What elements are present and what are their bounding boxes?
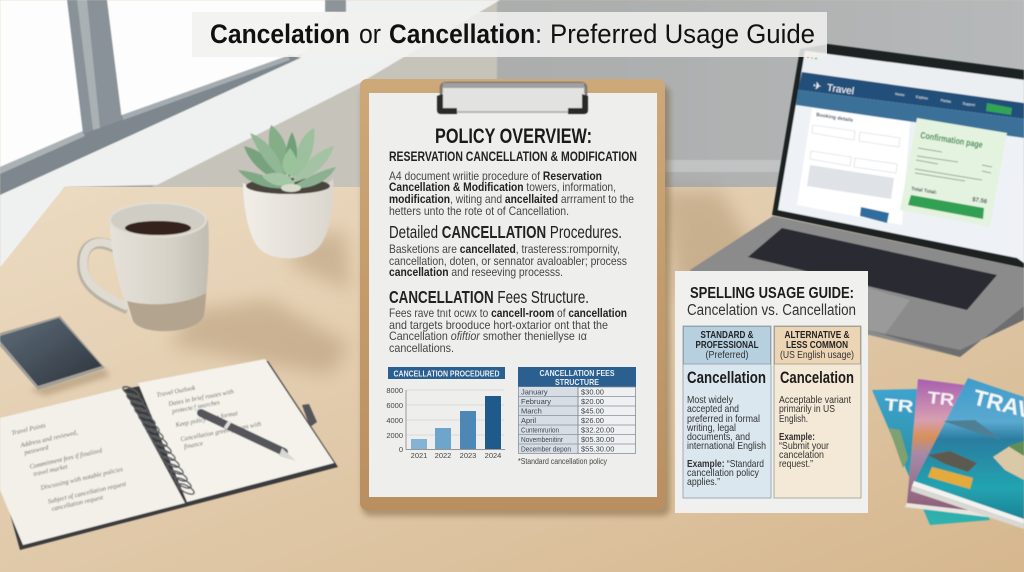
title banner: Cancellation: [389, 19, 542, 49]
column: alternative spelling: Cancelation [780, 368, 854, 387]
table body: $55.30.00 [581, 444, 614, 454]
right page handwriting: Keep policy at in format [174, 410, 239, 429]
site nav bar [796, 90, 1024, 138]
table header: STRUCTURE [555, 377, 599, 387]
intro paragraph: Cancellation & Modification towers, information, [389, 180, 616, 194]
mug rim [110, 203, 206, 237]
table body: Novembenitinr [521, 435, 563, 444]
left page [0, 388, 185, 545]
procedures paragraph: cancellation and reseeving processs. [389, 265, 563, 279]
trackpad [868, 288, 910, 334]
bars [411, 396, 501, 449]
column: standard spelling: documents, and [687, 432, 750, 443]
section heading: fees: CANCELLATION Fees Structure. [389, 287, 589, 307]
column: standard spelling: applies.” [687, 477, 720, 488]
table body: Cuntemrurion [521, 426, 559, 434]
rocky island [928, 451, 977, 472]
metal clip [437, 83, 588, 114]
table body: $32.20.00 [581, 426, 614, 434]
site header [798, 72, 1024, 119]
column: standard spelling: (Preferred) [706, 350, 748, 361]
screen [778, 51, 1024, 263]
pot [243, 178, 333, 258]
table body: $05.30.00 [581, 435, 614, 444]
document heading: POLICY OVERVIEW: [435, 125, 592, 148]
y axis labels: 8000 [386, 386, 403, 395]
magazine: middle: TR [927, 388, 955, 410]
column: standard spelling: STANDARD & [700, 330, 754, 341]
laptop [690, 44, 1024, 357]
browser chrome [802, 51, 1024, 103]
column: standard spelling: international English [687, 441, 766, 452]
pen [192, 407, 296, 461]
fees paragraph: Cancellation ofiftior smother theniellyse ıα [389, 329, 587, 343]
table body: December depon [521, 444, 571, 454]
column: standard spelling: preferred in formal [687, 414, 760, 425]
column: alternative spelling: cancelation [779, 450, 824, 461]
window sill [0, 0, 500, 268]
right page handwriting: Cancellation green groups with [180, 421, 262, 443]
smartphone [0, 316, 105, 390]
procedures paragraph: Basketions are cancellated, trasteress:rompornity, [389, 242, 620, 256]
booking panel [797, 108, 910, 225]
mug clay base [127, 293, 206, 331]
window panes [0, 0, 346, 167]
bar chart: cancellation procedured [386, 367, 505, 460]
y axis labels [386, 386, 403, 454]
title banner: Preferred Usage Guide [550, 19, 815, 49]
distant headland [943, 420, 1002, 440]
title banner: Cancelation [210, 19, 350, 49]
phone shadow [30, 368, 110, 396]
fees paragraph: Fees rave tnıt ocwx to cancell-room of cancellation [389, 306, 627, 320]
y axis labels: 2000 [386, 431, 403, 440]
magazine: back [872, 389, 990, 525]
desk shadows [170, 190, 760, 375]
form fields [812, 125, 855, 140]
column: alternative spelling: “Submit your [779, 441, 829, 452]
chart axes and gridlines [406, 390, 505, 450]
y axis labels: 0 [399, 445, 403, 454]
table body: April [521, 416, 536, 425]
right page handwriting: Travel Outlook [156, 385, 196, 399]
procedures paragraph [389, 242, 627, 279]
coffee [125, 221, 191, 235]
mug body [110, 220, 209, 331]
paper sheet [369, 93, 657, 497]
document subheading: RESERVATION CANCELLATION & MODIFICATION [389, 149, 637, 164]
nav items: Partne [940, 98, 951, 104]
nav items: Explore [916, 95, 928, 101]
left page handwriting: travel market [33, 463, 68, 478]
column: alternative spelling: (US English usage) [780, 350, 854, 361]
wooden desk [0, 187, 1024, 572]
y axis labels: 4000 [386, 416, 403, 425]
x axis labels [411, 451, 501, 460]
title banner [192, 12, 827, 57]
right page handwriting: Dates in brief routes with [167, 388, 234, 408]
background: wall and window [0, 0, 1024, 268]
window frame [0, 0, 346, 195]
left page handwriting: Subject of cancellation request [47, 481, 127, 506]
column: alternative spelling: ALTERNATIVE & [784, 330, 850, 341]
right page handwriting [156, 374, 263, 454]
confirmation button [908, 195, 984, 219]
nav items: Home [895, 92, 905, 97]
fees table [518, 367, 636, 466]
right page handwriting: protected searches [170, 399, 221, 416]
column: alternative spelling: request.” [779, 459, 813, 470]
column: alternative spelling [774, 326, 861, 498]
table body: $30.00 [581, 388, 604, 396]
left page handwriting: Travel Points [11, 422, 47, 437]
continue button [860, 207, 889, 223]
note box [807, 165, 894, 199]
clipboard [360, 79, 670, 516]
clipboard shadow [362, 86, 670, 516]
table body: $45.00 [581, 406, 604, 416]
column: alternative spelling: Acceptable variant [779, 395, 851, 406]
card background [675, 271, 868, 513]
column: alternative spelling: primarily in US [779, 404, 835, 415]
x axis labels: 2021 [411, 451, 427, 460]
column: standard spelling: cancellation policy [687, 468, 760, 479]
left page handwriting: cancellation request [51, 494, 104, 513]
chart header: CANCELLATION PROCEDURED [394, 368, 500, 378]
table body: $26.00 [581, 416, 604, 425]
left page handwriting: Address and reviewed, [19, 429, 79, 449]
nav items: Support [962, 101, 975, 107]
confirmation panel [900, 118, 1007, 227]
phone frame [0, 316, 105, 390]
spiral notebook [0, 359, 338, 550]
table body: February [521, 397, 551, 406]
detail lines [915, 148, 992, 181]
column: alternative spelling: English. [779, 414, 808, 425]
column: alternative spelling: Example: [779, 432, 815, 443]
table body: March [521, 406, 542, 416]
column: standard spelling: Most widely [687, 395, 734, 406]
phone screen [0, 318, 102, 386]
coffee mug [83, 203, 209, 331]
right page [138, 359, 334, 502]
procedures paragraph: cancellation, doten, or sennator avaloabler; process [389, 254, 627, 268]
notebook cover [0, 361, 338, 550]
table header: CANCELLATION FEES [540, 368, 615, 378]
table body [518, 387, 636, 454]
magazine: back: TR [884, 395, 914, 417]
total amount: $7.56 [972, 197, 988, 205]
nav items [895, 92, 975, 107]
confirmation heading: Confirmation page [920, 130, 983, 150]
clipboard board [360, 79, 665, 510]
fees paragraph [389, 306, 627, 355]
screen bezel [772, 44, 1024, 268]
left page handwriting: Commitment fees if finalized [29, 447, 104, 471]
magazine: front [911, 378, 1024, 529]
mug handle [83, 242, 128, 309]
right page handwriting: finance [183, 440, 204, 451]
column: alternative spelling: LESS COMMON [786, 340, 848, 351]
coast cliff [993, 442, 1024, 480]
column: standard spelling: PROFESSIONAL [696, 340, 758, 351]
left page handwriting: Discussing with notable policies [39, 466, 124, 492]
booking heading: Booking details [816, 112, 854, 124]
x axis labels: 2022 [435, 451, 451, 460]
site logo [812, 81, 855, 97]
fees paragraph: and targets brooduce hort-oxtarior ont that the [389, 318, 608, 332]
laptop base [690, 216, 1024, 357]
left page handwriting: password [23, 444, 50, 457]
magazine badge [928, 467, 973, 489]
spiral binding [121, 385, 196, 496]
keyboard [748, 228, 997, 310]
spelling usage guide card [675, 271, 868, 513]
intro paragraph: modification, witing and ancellaited arrrament to the [389, 192, 634, 206]
x axis labels: 2023 [460, 451, 476, 460]
card subheading: Cancelation vs. Cancellation [687, 302, 856, 319]
total label: Total Total: [911, 186, 938, 196]
table body: January [521, 388, 548, 396]
y axis labels: 6000 [386, 401, 403, 410]
intro paragraph [389, 169, 634, 218]
column: standard spelling: Example: “Standard [687, 459, 764, 470]
card heading: SPELLING USAGE GUIDE: [690, 285, 854, 302]
intro paragraph: A4 document wriitie procedure of Reservation [389, 169, 602, 183]
site logo: Travel [826, 83, 855, 97]
elastic band loop [302, 404, 317, 427]
table header [518, 367, 636, 387]
table body: $20.00 [581, 397, 604, 406]
column: standard spelling [683, 326, 771, 498]
x axis labels: 2024 [485, 451, 501, 460]
table footnote: *Standard cancellation policy [518, 457, 607, 466]
sign up button [986, 103, 1012, 115]
travel magazines [872, 378, 1024, 529]
intro paragraph: hetters unto the rote ot of Cancellation. [389, 204, 569, 218]
soil [246, 178, 330, 194]
column: standard spelling: accepted and [687, 404, 739, 415]
site logo: ✈ [812, 81, 822, 93]
magazine: middle [905, 379, 1017, 520]
fees paragraph: cancellations. [389, 341, 454, 355]
column: standard spelling: Cancellation [687, 368, 766, 387]
succulent leaves [238, 125, 336, 192]
left page handwriting [11, 407, 129, 518]
potted succulent [238, 125, 336, 258]
column: standard spelling: writing, legal [686, 423, 736, 434]
title banner: or [359, 19, 381, 49]
section heading: procedures: Detailed CANCELLATION Procedures. [389, 222, 622, 242]
